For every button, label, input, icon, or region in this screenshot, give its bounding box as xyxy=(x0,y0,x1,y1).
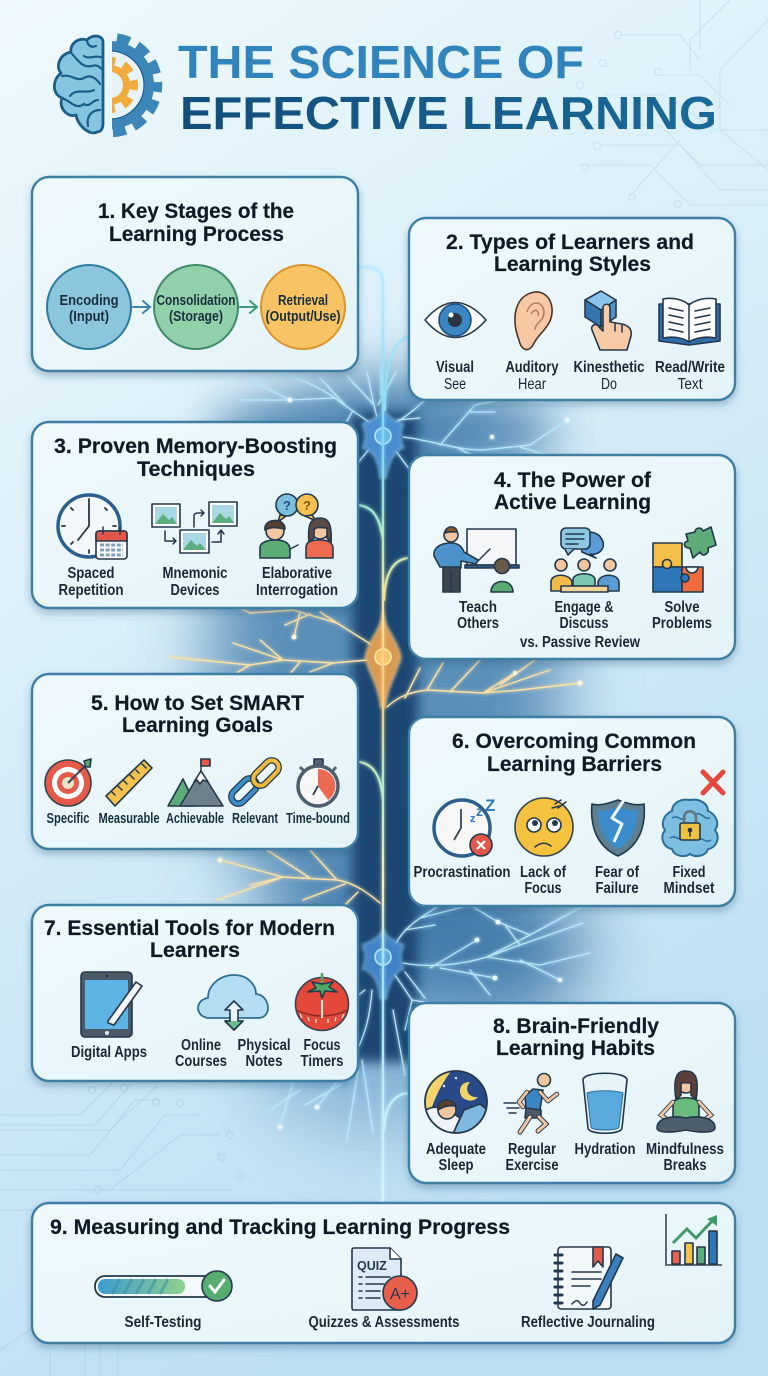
labels: SMART: Time-bound xyxy=(286,811,350,827)
heading 7 xyxy=(44,916,335,962)
labels: techniques: Mnemonic xyxy=(162,565,228,582)
icon: two people asking questions: ? xyxy=(303,498,311,513)
labels: barriers: Fear of xyxy=(595,864,640,881)
labels: active learning: Solve xyxy=(664,599,700,616)
neural network: blue neuron top xyxy=(240,368,569,470)
icon: growth chart xyxy=(666,1214,722,1265)
heading 5: Learning Goals xyxy=(122,713,273,737)
stage: retrieval: Retrieval xyxy=(278,293,328,309)
icon: cracked shield xyxy=(592,800,644,856)
labels: active learning: Discuss xyxy=(560,615,608,632)
icon: cube and hand xyxy=(585,291,631,350)
labels: learner types: See xyxy=(444,376,466,393)
heading 8: Learning Habits xyxy=(496,1036,655,1060)
labels: tools: Timers xyxy=(300,1053,344,1070)
labels: habits: Exercise xyxy=(506,1157,559,1174)
labels: habits: Mindfulness xyxy=(646,1141,724,1158)
title xyxy=(178,36,717,139)
heading 7: 7. Essential Tools for Modern xyxy=(44,916,335,940)
title: EFFECTIVE LEARNING xyxy=(180,87,717,139)
stage: consolidation: Consolidation xyxy=(156,293,236,309)
icon: cloud with arrows xyxy=(198,975,268,1030)
heading 8: 8. Brain-Friendly xyxy=(493,1014,659,1038)
panel 7: essential tools xyxy=(32,905,358,1081)
neural network: blue neuron bottom xyxy=(270,900,590,1140)
labels: barriers: Failure xyxy=(596,880,639,897)
labels: techniques: Repetition xyxy=(58,582,124,599)
icon: two people asking questions: ? xyxy=(283,498,291,513)
neuron body: blue bottom xyxy=(362,929,404,999)
labels: progress: Reflective Journaling xyxy=(521,1314,655,1331)
panel 8: brain-friendly habits xyxy=(409,1003,735,1183)
icon: chain link xyxy=(228,757,282,807)
neural network: orange neuron xyxy=(170,600,582,905)
heading 5 xyxy=(91,691,304,737)
icon: tomato timer xyxy=(296,973,348,1030)
heading 2: 2. Types of Learners and xyxy=(446,230,694,254)
labels: active learning: Problems xyxy=(652,615,712,632)
stage: retrieval: (Output/Use) xyxy=(266,309,341,325)
stage: retrieval xyxy=(261,265,345,349)
labels: tools: Physical xyxy=(238,1037,290,1054)
heading 1: 1. Key Stages of the xyxy=(98,199,294,223)
heading 7: Learners xyxy=(150,938,240,962)
labels: techniques: Interrogation xyxy=(256,582,338,599)
labels: learner types xyxy=(436,359,725,393)
heading 6 xyxy=(452,729,696,776)
labels: progress xyxy=(124,1314,655,1331)
labels: barriers: Fixed xyxy=(672,864,706,881)
labels: SMART: Relevant xyxy=(232,811,278,827)
labels: tools: Notes xyxy=(246,1053,282,1070)
circuit pattern: top right xyxy=(576,0,768,208)
icon: teacher at whiteboard xyxy=(434,527,519,592)
icon: sleeping person under moon xyxy=(424,1070,490,1136)
labels: progress: Quizzes & Assessments xyxy=(308,1314,460,1331)
stage: consolidation xyxy=(154,265,238,349)
heading 3: Techniques xyxy=(137,457,255,481)
labels: habits: Adequate xyxy=(426,1141,486,1158)
heading 4 xyxy=(494,468,652,514)
heading 8 xyxy=(493,1014,659,1060)
labels: SMART: Achievable xyxy=(166,811,224,827)
labels: tools: Online xyxy=(181,1037,221,1054)
icon: clock with zzz: Z xyxy=(485,796,495,815)
heading 6: 6. Overcoming Common xyxy=(452,729,696,753)
labels: techniques xyxy=(58,565,338,599)
icon: glass of water xyxy=(583,1073,627,1133)
heading 3: 3. Proven Memory-Boosting xyxy=(54,434,337,458)
labels: barriers: Focus xyxy=(524,880,562,897)
labels: tools: Digital Apps xyxy=(71,1044,147,1061)
labels: active learning xyxy=(457,599,712,651)
heading 3 xyxy=(54,434,337,481)
icon: puzzle pieces xyxy=(653,527,716,592)
labels: techniques: Elaborative xyxy=(262,565,332,582)
heading 2 xyxy=(446,230,694,276)
icon: mnemonic image chain xyxy=(152,502,237,553)
arrow: consolidation to retrieval xyxy=(240,301,257,313)
labels: techniques: Spaced xyxy=(68,565,114,582)
icon: open book xyxy=(659,298,720,345)
title: THE SCIENCE OF xyxy=(178,36,584,88)
icon: ruler xyxy=(106,760,152,806)
stage: encoding xyxy=(47,265,131,349)
icon: journal and pen xyxy=(555,1247,623,1309)
icon: unfocused face xyxy=(515,798,573,856)
icon: quiz sheet xyxy=(352,1248,417,1310)
heading 1: Learning Process xyxy=(109,222,284,246)
icon: mountain with flag xyxy=(168,759,223,806)
labels: learner types: Auditory xyxy=(506,359,559,376)
labels: learner types: Do xyxy=(601,376,617,393)
labels: learner types: Hear xyxy=(518,376,546,393)
panel 5: SMART goals xyxy=(32,674,358,849)
icon: stopwatch xyxy=(298,759,338,806)
neural background glow xyxy=(210,380,585,1135)
heading 1 xyxy=(98,199,294,246)
panel 4: active learning xyxy=(409,455,735,659)
stage: encoding: Encoding xyxy=(60,293,118,309)
heading 6: Learning Barriers xyxy=(487,752,662,776)
icon: red cross xyxy=(703,772,723,793)
labels: barriers: Procrastination xyxy=(414,864,510,881)
circuit pattern: bottom left xyxy=(0,1080,244,1376)
icon: quiz sheet: A+ xyxy=(390,1286,410,1303)
labels: active learning: vs. Passive Review xyxy=(520,634,641,651)
panel 1: key stages xyxy=(32,177,358,371)
icon: ear xyxy=(515,292,552,350)
icon: quiz sheet: QUIZ xyxy=(357,1259,387,1273)
icon: meditating person xyxy=(657,1071,715,1132)
icon: clock with zzz: z xyxy=(476,803,483,819)
heading 2: Learning Styles xyxy=(494,252,651,276)
labels: active learning: Others xyxy=(457,615,499,632)
icon: clock with zzz xyxy=(434,796,495,856)
labels: habits: Hydration xyxy=(574,1141,636,1158)
labels: learner types: Read/Write xyxy=(655,359,725,376)
labels: active learning: Engage & xyxy=(554,599,614,616)
labels: habits xyxy=(426,1141,724,1174)
labels: learner types: Text xyxy=(678,376,703,393)
neuron body: orange xyxy=(365,612,401,708)
icon: brain and gear logo xyxy=(54,36,158,133)
labels: barriers xyxy=(414,864,714,897)
labels: learner types: Kinesthetic xyxy=(574,359,645,376)
labels: SMART: Measurable xyxy=(98,811,160,827)
labels: tools: Focus xyxy=(304,1037,340,1054)
labels: progress: Self-Testing xyxy=(124,1314,202,1331)
heading 4: Active Learning xyxy=(494,490,651,514)
labels: SMART: Specific xyxy=(46,811,90,827)
labels: tools xyxy=(71,1037,344,1070)
icon: clock with zzz: z xyxy=(470,813,476,825)
panel 3: memory techniques xyxy=(32,422,358,608)
labels: active learning: Teach xyxy=(459,599,497,616)
labels: tools: Courses xyxy=(175,1053,227,1070)
labels: barriers: Lack of xyxy=(520,864,567,881)
labels: habits: Sleep xyxy=(438,1157,474,1174)
icon: group discussion xyxy=(551,528,619,592)
icon: eye xyxy=(425,302,486,338)
stage: consolidation: (Storage) xyxy=(169,309,223,325)
labels: habits: Regular xyxy=(508,1141,556,1158)
heading 4: 4. The Power of xyxy=(494,468,652,492)
labels: SMART xyxy=(46,811,350,827)
icon: runner xyxy=(504,1074,557,1132)
labels: barriers: Mindset xyxy=(664,880,714,897)
axon with side branches xyxy=(358,267,408,1203)
labels: learner types: Visual xyxy=(436,359,474,376)
icon: two people asking questions xyxy=(260,494,333,558)
panel 9: measuring progress xyxy=(32,1203,735,1343)
neuron body: blue top xyxy=(362,408,404,478)
labels: habits: Breaks xyxy=(664,1157,706,1174)
icon: tablet and stylus xyxy=(81,972,142,1037)
icon: target xyxy=(45,759,91,806)
heading 9: 9. Measuring and Tracking Learning Progress xyxy=(50,1215,510,1239)
arrow: encoding to consolidation xyxy=(133,301,150,313)
labels: techniques: Devices xyxy=(170,582,220,599)
icon: progress bar xyxy=(95,1271,232,1301)
heading 5: 5. How to Set SMART xyxy=(91,691,304,715)
panel 2: types of learners xyxy=(409,218,735,400)
stage: encoding: (Input) xyxy=(69,309,109,325)
icon: clock and calendar xyxy=(58,495,127,559)
icon: brain with lock xyxy=(662,800,718,856)
panel 6: learning barriers xyxy=(409,717,735,906)
